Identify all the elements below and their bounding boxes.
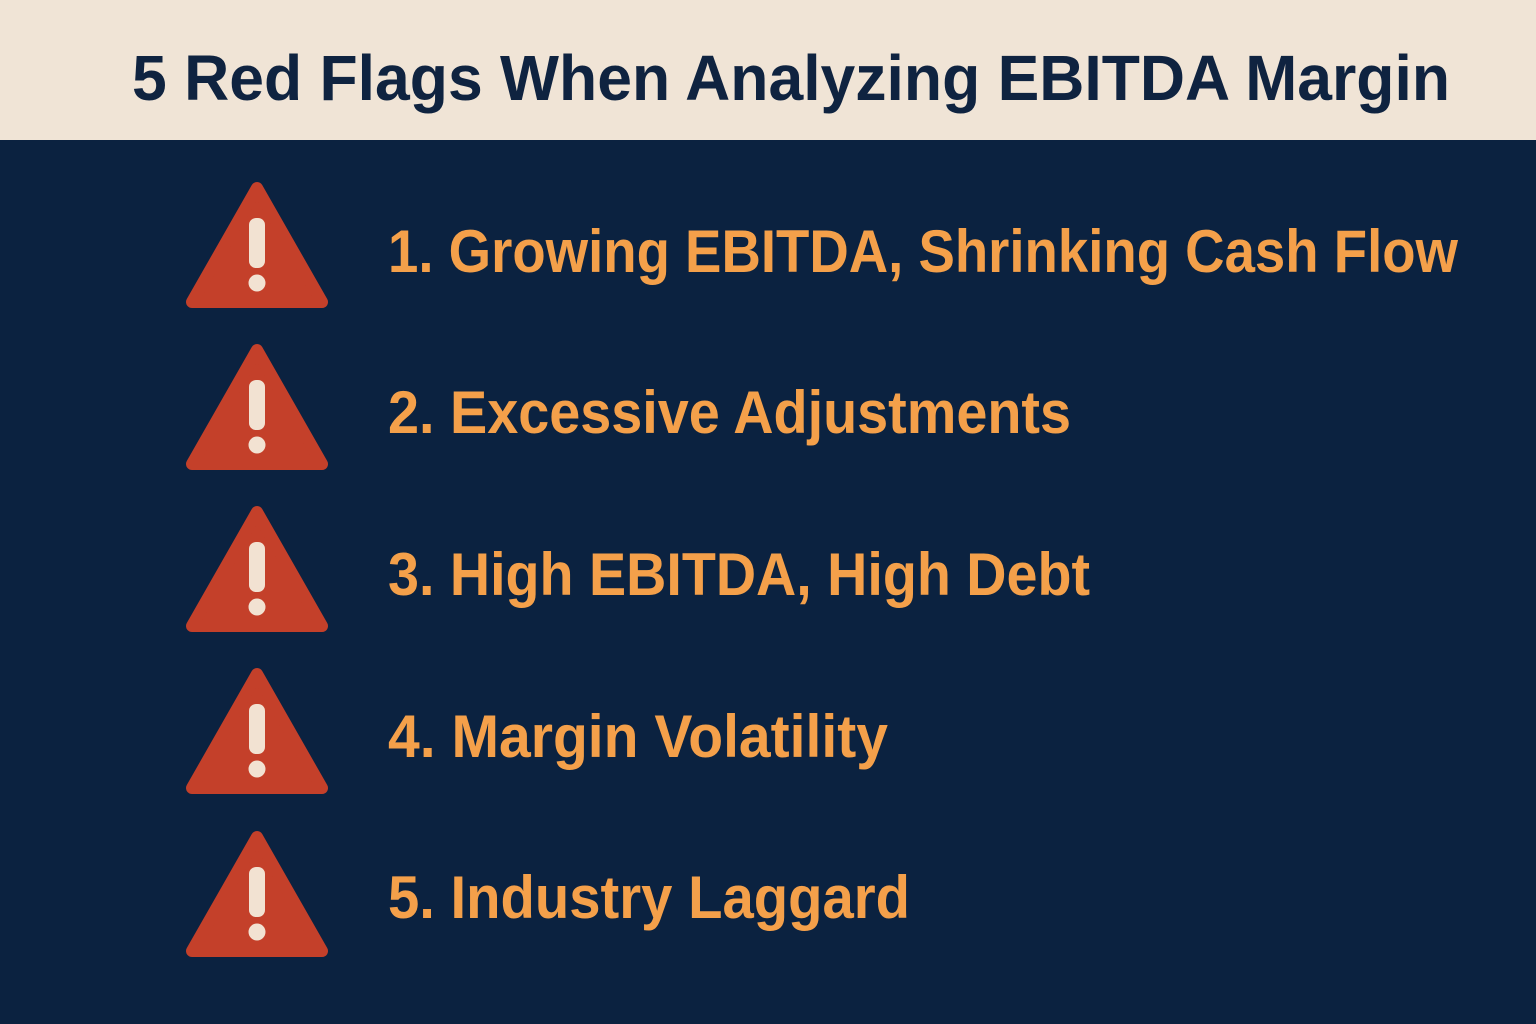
item 2 [192, 350, 1071, 464]
icon: warning triangle 5 [192, 837, 322, 951]
text: item 4: 4. Margin Volatility [388, 703, 889, 770]
item 5 [192, 837, 910, 951]
item 3 [192, 512, 1090, 626]
icon: warning triangle 2 [192, 350, 322, 464]
icon: warning triangle 3 [192, 512, 322, 626]
text: item 1: 1. Growing EBITDA, Shrinking Cash Flow [388, 218, 1458, 285]
item 4 [192, 674, 889, 788]
icon: warning triangle 1 [192, 188, 322, 302]
text: item 3: 3. High EBITDA, High Debt [388, 541, 1090, 608]
header banner [0, 0, 1536, 140]
title: 5 Red Flags When Analyzing EBITDA Margin [132, 42, 1450, 114]
text: item 2: 2. Excessive Adjustments [388, 379, 1071, 446]
item 1 [192, 188, 1458, 302]
icon: warning triangle 4 [192, 674, 322, 788]
text: item 5: 5. Industry Laggard [388, 864, 910, 931]
